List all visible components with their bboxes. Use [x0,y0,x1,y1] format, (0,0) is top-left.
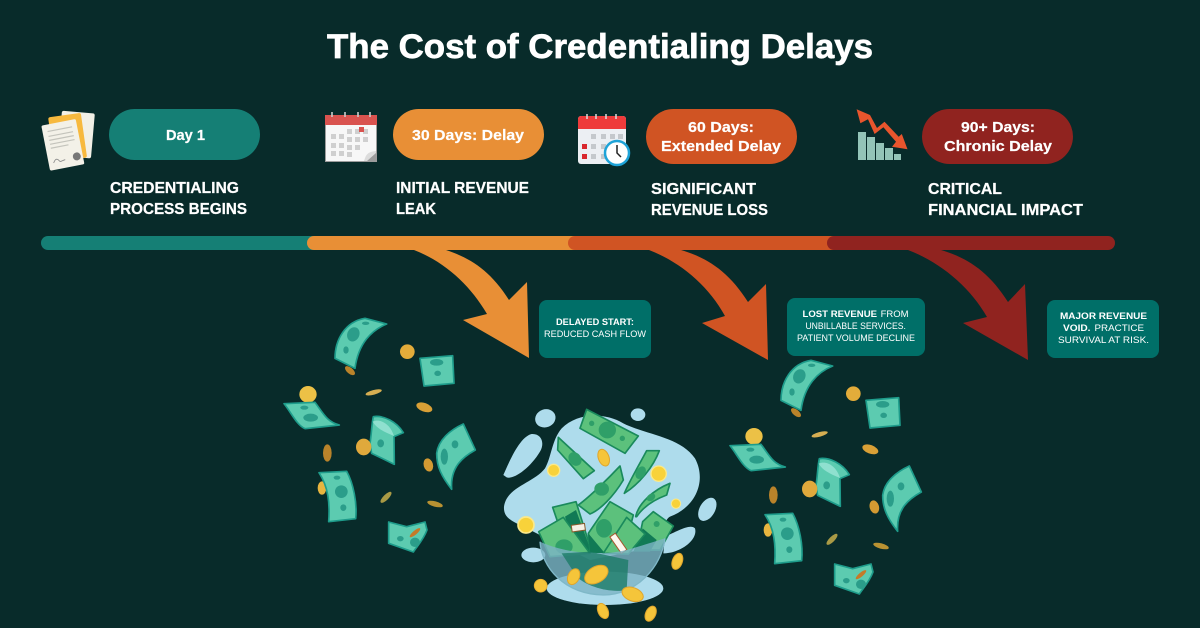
icon: calendar [325,112,377,162]
label: credentialing process begins [110,180,247,218]
label: significant revenue loss: REVENUE LOSS [651,202,768,219]
label: significant revenue loss [651,181,768,219]
glass bowl [540,538,665,595]
callout: delayed start: REDUCED CASH FLOW [544,329,646,340]
label: critical financial impact [928,181,1083,219]
callout: lost revenue: FROM [881,309,909,320]
icon: documents [41,111,95,171]
pill: 90+ Days Chronic Delay: Chronic Delay [944,138,1053,155]
label: credentialing process begins: CREDENTIALING [110,180,239,197]
callout: lost revenue: UNBILLABLE SERVICES. [805,321,906,332]
coins [518,448,685,623]
illustration: flying money left [284,318,475,552]
stage: 60 days [578,109,797,219]
callout: delayed start: DELAYED START: [556,317,634,328]
label: critical financial impact: CRITICAL [928,181,1002,198]
callout: major revenue void [1047,300,1159,358]
label: initial revenue leak: INITIAL REVENUE [396,180,529,197]
pill: Day 1: Day 1 [166,127,205,144]
label: critical financial impact: FINANCIAL IMPACT [928,202,1083,219]
illustration: bowl of money [503,406,720,623]
callout: lost revenue: PATIENT VOLUME DECLINE [797,333,915,344]
falling bills [558,409,670,517]
callout: major revenue void: SURVIVAL AT RISK. [1058,335,1149,346]
timeline bar [41,236,1115,250]
pill: 60 Days Extended Delay [646,109,797,164]
icon: calendar with clock [578,114,629,165]
arrow: orange [414,250,529,358]
callout: major revenue void: VOID. [1063,323,1090,334]
arrow: dark red [908,250,1028,360]
callout: major revenue void: MAJOR REVENUE [1060,311,1147,322]
arrow: red-orange [649,250,768,360]
light blue splash [503,406,720,605]
pill: 60 Days Extended Delay: 60 Days: [688,119,754,136]
label: initial revenue leak [396,180,529,218]
label: significant revenue loss: SIGNIFICANT [651,181,756,198]
label: initial revenue leak: LEAK [396,201,436,218]
callout: lost revenue [787,298,925,356]
callout: delayed start [539,300,651,358]
label: credentialing process begins: PROCESS BEGINS [110,201,247,218]
pill: 30 Days Delay: 30 Days: Delay [412,127,525,144]
pill: 90+ Days Chronic Delay: 90+ Days: [961,119,1035,136]
callout: major revenue void: PRACTICE [1094,323,1144,334]
pill: 30 Days Delay [393,109,544,160]
icon: falling bar chart [857,109,908,160]
stage: day 1 [41,109,260,218]
stage: 30 days [325,109,544,218]
illustration: flying money right [730,360,921,594]
bills piled in bowl [539,502,673,557]
callout: lost revenue: LOST REVENUE [802,309,877,320]
pill: Day 1 [109,109,260,160]
pill: 90+ Days Chronic Delay [922,109,1073,164]
stage: 90+ days [857,109,1083,219]
pill: 60 Days Extended Delay: Extended Delay [661,138,782,155]
title: The Cost of Credentialing Delays [327,28,873,66]
